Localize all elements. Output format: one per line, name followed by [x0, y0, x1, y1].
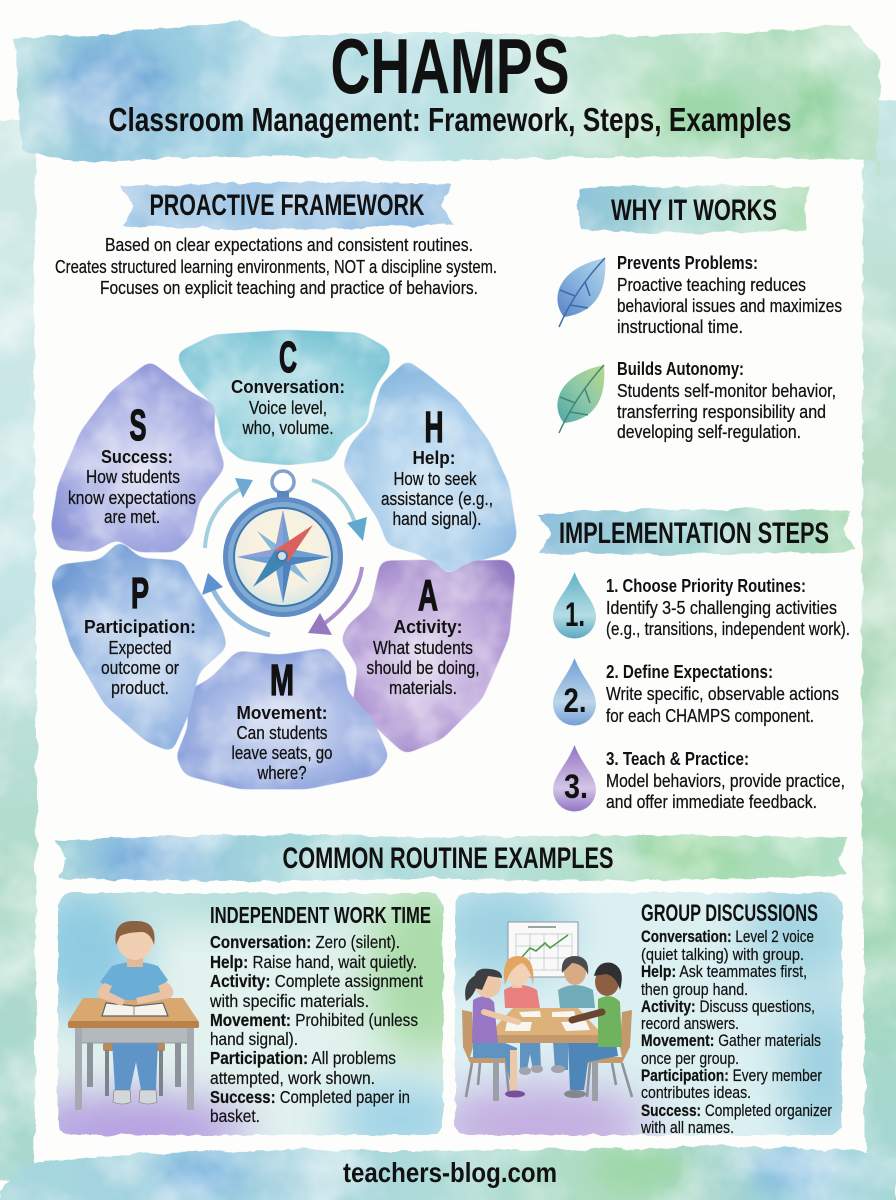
step 2 text: for each CHAMPS component.: [606, 705, 814, 726]
routine list: independent work: attempted, work shown.: [210, 1068, 375, 1088]
step 2 text: Write specific, observable actions: [606, 683, 839, 704]
routine list: group discussions: Conversation: Level 2 voice: [641, 927, 814, 946]
text: prevents problems: Proactive teaching reduces: [617, 274, 806, 295]
segment: C Conversation: who, volume.: [242, 417, 334, 438]
routine list: group discussions: Activity: Discuss questions,: [641, 997, 815, 1016]
step 3 text: Model behaviors, provide practice,: [606, 770, 845, 791]
text: builds autonomy: transferring responsibility and: [617, 401, 826, 422]
routine list: group discussions: then group hand.: [641, 980, 748, 999]
segment: S Success: know expectations: [68, 487, 196, 508]
icon: blue leaf: [557, 258, 605, 327]
text: prevents problems: instructional time.: [617, 316, 743, 337]
segment: M Movement: M: [270, 656, 294, 705]
segment: P Participation: Expected: [108, 637, 172, 658]
framework description: Focuses on explicit teaching and practice of behaviors.: [100, 277, 478, 298]
panel: group discussions: [454, 891, 844, 1136]
routine list: independent work: hand signal).: [210, 1029, 298, 1049]
segment: S Success: How students: [86, 466, 180, 487]
segment: M Movement: leave seats, go: [232, 742, 332, 763]
chart: CHAMPS wheel: [51, 330, 517, 789]
routine list: independent work: Participation: All problems: [210, 1048, 396, 1068]
step 1 text: [606, 575, 850, 639]
routine list: group discussions: Help: Ask teammates first,: [641, 962, 807, 981]
panel: why it works: [557, 186, 842, 442]
icon: drop 2: [553, 658, 596, 726]
title: CHAMPS: [330, 22, 570, 110]
text: prevents problems: Prevents Problems:: [617, 252, 758, 273]
routine list: group discussions: contributes ideas.: [641, 1083, 751, 1102]
student in purple: [473, 1043, 517, 1090]
text: prevents problems: [617, 252, 842, 337]
arrow: C to H: [312, 480, 367, 541]
step 2 text: 2. Define Expectations:: [606, 661, 773, 682]
routine list: group discussions: [640, 927, 832, 1137]
table: [488, 1008, 603, 1035]
step 1: [553, 572, 850, 639]
step 3 text: [606, 748, 845, 812]
icon: compass: [223, 471, 343, 617]
routine list: group discussions: (quiet talking) with group.: [641, 945, 804, 964]
step 3: [553, 745, 845, 812]
segment: S Success: S: [130, 401, 146, 450]
arrow: M to P: [202, 573, 270, 635]
routine list: group discussions: Participation: Every member: [641, 1066, 822, 1085]
text: builds autonomy: Students self-monitor behavior,: [617, 380, 836, 401]
routine list: independent work: Movement: Prohibited (unless: [210, 1010, 418, 1030]
routine list: independent work: Success: Completed paper in: [210, 1087, 410, 1107]
segment: A Activity: [341, 560, 515, 754]
segment: P Participation: outcome or: [101, 657, 179, 678]
panel background: [454, 891, 844, 1136]
segment: A Activity: What students: [373, 637, 473, 658]
icon: drop 1: [553, 572, 596, 638]
framework description: Based on clear expectations and consistent routines.: [105, 234, 473, 255]
segment: S Success: are met.: [104, 506, 160, 527]
routine list: independent work: Help: Raise hand, wait quietly.: [210, 952, 417, 972]
segment: C Conversation: [177, 330, 390, 465]
segment: H Help: Help:: [412, 447, 456, 468]
segment: M Movement: Movement:: [236, 702, 328, 723]
segment: C Conversation: Voice level,: [249, 397, 327, 418]
routine list: independent work: basket.: [210, 1106, 260, 1126]
panel background: [56, 892, 444, 1136]
segment: S Success: [51, 361, 225, 552]
segment: P Participation: [51, 541, 227, 752]
panel: independent work time: [56, 892, 444, 1136]
chairs: [462, 1010, 507, 1063]
segment: H Help: How to seek: [394, 468, 477, 489]
segment: P Participation: P: [131, 569, 149, 618]
step 2 text: [606, 661, 839, 726]
icon: drop 2: 2.: [564, 682, 586, 720]
student in teal: [558, 985, 595, 1008]
framework description: Creates structured learning environments, NOT a discipline system.: [55, 256, 497, 277]
segment: H Help: assistance (e.g.,: [381, 488, 493, 509]
illustration: student at desk: [68, 921, 199, 1110]
heading: common routine examples: COMMON ROUTINE EXAMPLES: [282, 842, 614, 875]
text: builds autonomy: Builds Autonomy:: [617, 358, 744, 379]
icon: drop 1: 1.: [565, 596, 585, 634]
routine list: group discussions: once per group.: [641, 1049, 739, 1068]
step 3 text: and offer immediate feedback.: [606, 791, 817, 812]
segment: S Success: Success:: [101, 446, 173, 467]
panel: proactive framework heading: PROACTIVE FRAMEWORK: [150, 189, 425, 222]
framework description: [55, 234, 497, 298]
segment: C Conversation: C: [279, 333, 297, 382]
icon: green leaf: [557, 365, 604, 433]
routine list: group discussions: Movement: Gather materials: [641, 1031, 821, 1050]
heading: implementation steps: [537, 509, 853, 555]
step 1 text: Identify 3-5 challenging activities: [606, 597, 837, 618]
segment: A Activity: Activity:: [394, 616, 462, 637]
student in pink: [504, 985, 540, 1008]
routine list: group discussions: record answers.: [641, 1014, 739, 1033]
icon: drop 3: 3.: [564, 768, 588, 806]
step 3 text: 3. Teach & Practice:: [606, 748, 749, 769]
segment: P Participation: Participation:: [84, 616, 196, 637]
heading: why it works: [578, 186, 808, 233]
heading: independent work time: INDEPENDENT WORK TIME: [210, 902, 431, 928]
heading: common routine examples: [54, 833, 848, 883]
text: prevents problems: behavioral issues and maximizes: [617, 295, 842, 316]
segment: A Activity: materials.: [389, 677, 457, 698]
text: builds autonomy: [617, 358, 836, 442]
segment: M Movement: where?: [257, 762, 306, 783]
segment: M Movement: [176, 648, 389, 789]
segment: A Activity: should be doing,: [366, 657, 480, 678]
routine list: group discussions: with all names.: [640, 1118, 734, 1137]
step 1 text: 1. Choose Priority Routines:: [606, 575, 806, 596]
panel: implementation steps: [537, 509, 853, 812]
text: builds autonomy: developing self-regulation.: [617, 421, 801, 442]
icon: drop 3: [553, 745, 596, 812]
routine list: independent work: Conversation: Zero (silent).: [210, 932, 400, 952]
arrow: A to M: [308, 567, 362, 635]
segment: M Movement: Can students: [236, 722, 328, 743]
routine list: independent work: with specific materials.: [209, 991, 369, 1011]
routine list: group discussions: Success: Completed organizer: [641, 1101, 832, 1120]
panel: proactive framework heading: [120, 182, 454, 229]
segment: H Help: H: [424, 403, 444, 452]
segment: H Help: [343, 360, 517, 573]
illustration: students at table with chart: [462, 922, 632, 1101]
segment: H Help: hand signal).: [392, 508, 482, 529]
footer: website: teachers-blog.com: [343, 1157, 557, 1188]
student in green: [568, 1043, 618, 1090]
arrow: P to S: [205, 478, 253, 548]
segment: P Participation: product.: [111, 677, 169, 698]
heading: group discussions: GROUP DISCUSSIONS: [641, 900, 818, 927]
heading: why it works: WHY IT WORKS: [611, 194, 777, 227]
wall chart: [508, 922, 578, 977]
segment: A Activity: A: [418, 571, 438, 620]
routine list: independent work: Activity: Complete assignment: [210, 971, 423, 991]
segment: C Conversation: Conversation:: [231, 376, 345, 397]
step 2: [553, 658, 839, 726]
routine list: independent work: [209, 932, 423, 1126]
